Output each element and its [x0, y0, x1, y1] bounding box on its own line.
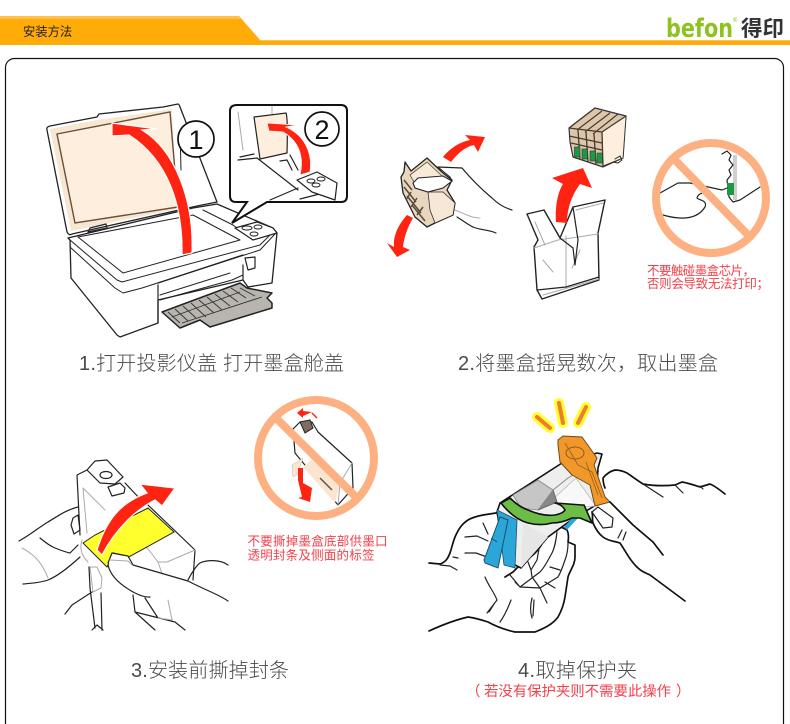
printer lid	[47, 104, 217, 235]
printer body	[68, 204, 277, 337]
step 4 note: ）	[676, 683, 690, 700]
warning text: 否则会导致无法打印；	[647, 277, 769, 291]
warning text: 透明封条及侧面的标签	[248, 548, 375, 562]
opened bag	[527, 200, 605, 299]
logo: befon	[666, 14, 733, 44]
red arrow 1	[112, 123, 192, 255]
shake arrow down	[387, 215, 413, 257]
right hand	[592, 470, 725, 601]
green arrow	[501, 498, 592, 524]
hand holding cartridge	[401, 158, 512, 233]
header bar	[0, 16, 790, 45]
yellow tape	[83, 508, 174, 567]
ink hatch latch	[245, 257, 255, 270]
prohibition: do not touch chip	[656, 143, 766, 253]
step 4 note: （	[466, 683, 480, 700]
step 1 illustration: printer	[47, 104, 347, 337]
number 2: 2	[314, 115, 330, 145]
orange clip	[558, 436, 610, 506]
warning text: 不要触碰墨盒芯片，	[647, 263, 755, 278]
control panel	[235, 222, 277, 240]
paper tray	[162, 283, 272, 328]
step 2 illustration: shake and unpack	[387, 108, 769, 299]
warning text	[647, 263, 769, 291]
logo: ®	[733, 17, 738, 24]
hands	[19, 507, 228, 630]
number 2	[305, 112, 339, 146]
red arrow 2	[267, 123, 311, 175]
yellow burst marks	[537, 403, 586, 428]
step 3 illustration: peel tape	[19, 400, 388, 630]
peel arrow	[97, 484, 175, 555]
prohibition: do not tear label	[258, 400, 374, 516]
number 1: 1	[188, 125, 204, 155]
step 4 illustration: remove clip	[429, 403, 725, 632]
cartridge set	[569, 108, 626, 167]
step 1 caption: 1.打开投影仪盖 打开墨盒舱盖	[79, 352, 344, 375]
step 2 caption: 2.将墨盒摇晃数次，取出墨盒	[458, 352, 718, 375]
callout inset	[230, 105, 347, 223]
left hand	[429, 513, 575, 632]
logo: 得印	[741, 17, 784, 41]
warning text	[248, 534, 388, 562]
warning text: 不要撕掉墨盒底部供墨口	[248, 534, 388, 548]
step 4 caption: 4.取掉保护夹	[518, 659, 637, 682]
cartridge body	[497, 453, 602, 568]
cartridge	[77, 460, 195, 600]
unpack arrow	[552, 168, 592, 223]
number 1	[178, 121, 214, 157]
blue clip	[484, 510, 578, 568]
step 3 caption: 3.安装前撕掉封条	[131, 659, 289, 682]
step 4 note: 若没有保护夹则不需要此操作	[484, 683, 671, 700]
shake arrow up	[443, 135, 485, 162]
header bar: 安装方法	[23, 24, 72, 39]
